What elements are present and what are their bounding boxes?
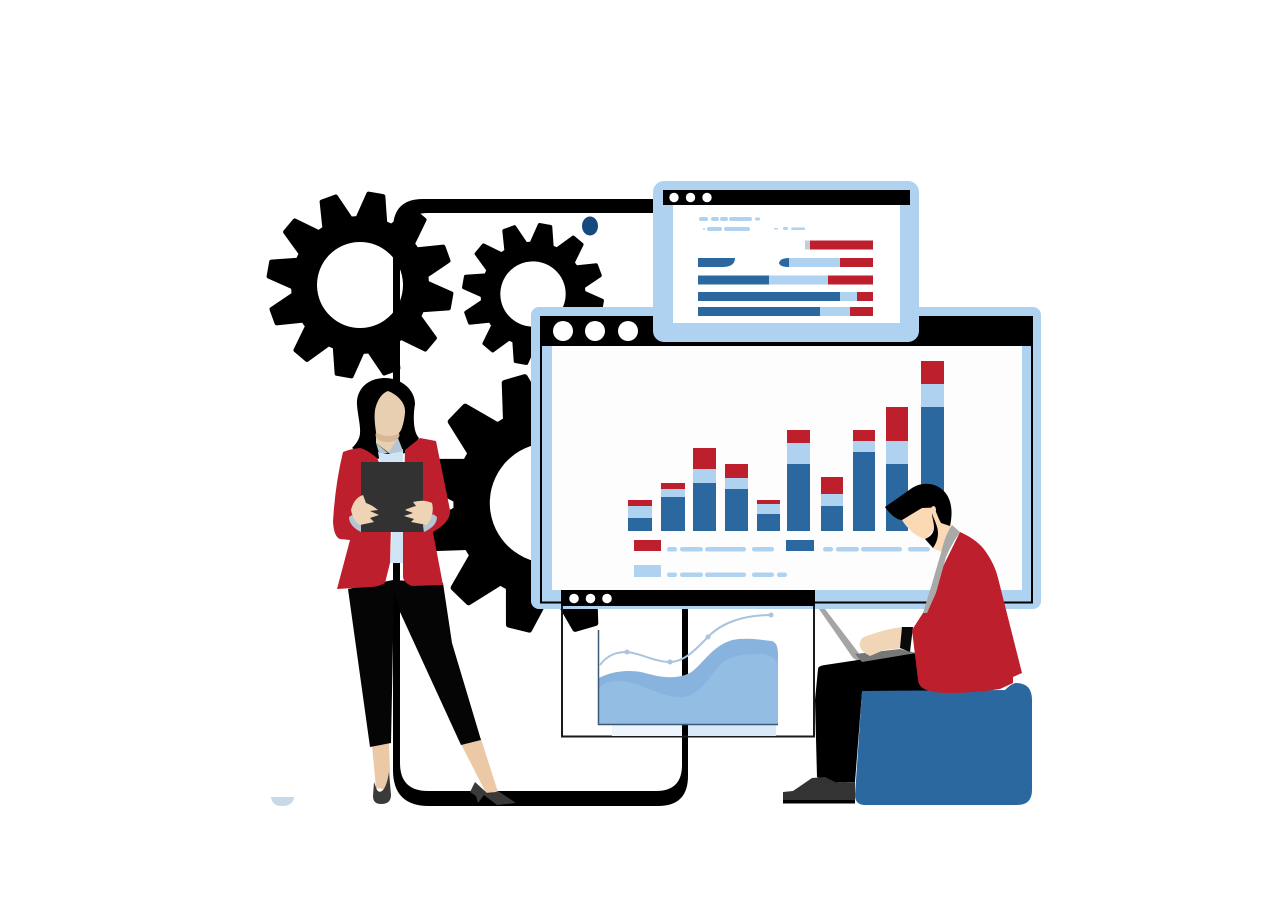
window frame [541, 317, 1032, 602]
hair [352, 378, 419, 460]
chart area [552, 346, 1022, 590]
area back layer [599, 639, 778, 725]
trousers [815, 653, 950, 783]
stacked bar chart [628, 361, 944, 531]
collar [376, 438, 403, 453]
forearm and hand [860, 627, 903, 656]
window buttons [669, 193, 712, 202]
chart legend [634, 540, 930, 577]
neck [932, 510, 951, 552]
face [902, 508, 938, 539]
window outline [562, 591, 814, 736]
area front layer [599, 654, 778, 725]
ear [931, 506, 936, 514]
shirt cuff [900, 627, 913, 652]
left sleeve cuff [349, 515, 362, 532]
right shin [461, 739, 498, 793]
horizontal stacked bars [698, 240, 873, 316]
panel: top horizontal bar window [653, 181, 919, 342]
jacket right [403, 438, 450, 586]
chart axes [598, 630, 778, 724]
stool [855, 683, 1032, 805]
laptop base [855, 649, 916, 662]
text placeholder pills [699, 217, 805, 231]
panel: main dashboard window [333, 181, 1041, 805]
left shin [372, 743, 390, 790]
trousers [348, 580, 481, 747]
chin shadow [376, 428, 400, 442]
trend line with points [600, 612, 774, 665]
header bar [540, 316, 1032, 346]
right hand [404, 501, 433, 525]
content area [673, 205, 900, 323]
shoe sole [783, 800, 855, 804]
jacket left [333, 448, 392, 589]
jacket [912, 532, 1022, 693]
tablet [361, 462, 423, 532]
man figure on stool [783, 484, 1032, 805]
panel: small area chart window [561, 590, 815, 736]
shirt [378, 449, 405, 563]
phone camera dot [582, 216, 598, 236]
hair [885, 484, 952, 526]
small floor mark [271, 797, 294, 806]
face [375, 391, 405, 436]
icon: large gear top left [252, 177, 468, 393]
blue inner side bands [542, 346, 1031, 601]
icon: big gear behind panels [391, 344, 709, 662]
floor reflection under chart [612, 725, 682, 736]
beard [925, 513, 938, 548]
neck [376, 428, 400, 453]
right sleeve cuff [423, 514, 437, 532]
lapel [923, 525, 960, 613]
left hand [351, 495, 379, 525]
phone outline [393, 199, 688, 806]
right shoe [470, 782, 516, 805]
window buttons [553, 321, 638, 341]
header bar [663, 190, 910, 205]
woman figure [333, 378, 516, 805]
shoe [783, 777, 855, 803]
left shoe [373, 772, 391, 804]
header bar [561, 590, 815, 606]
laptop screen [819, 609, 864, 663]
icon: medium gear [451, 212, 615, 376]
window buttons [569, 594, 612, 603]
